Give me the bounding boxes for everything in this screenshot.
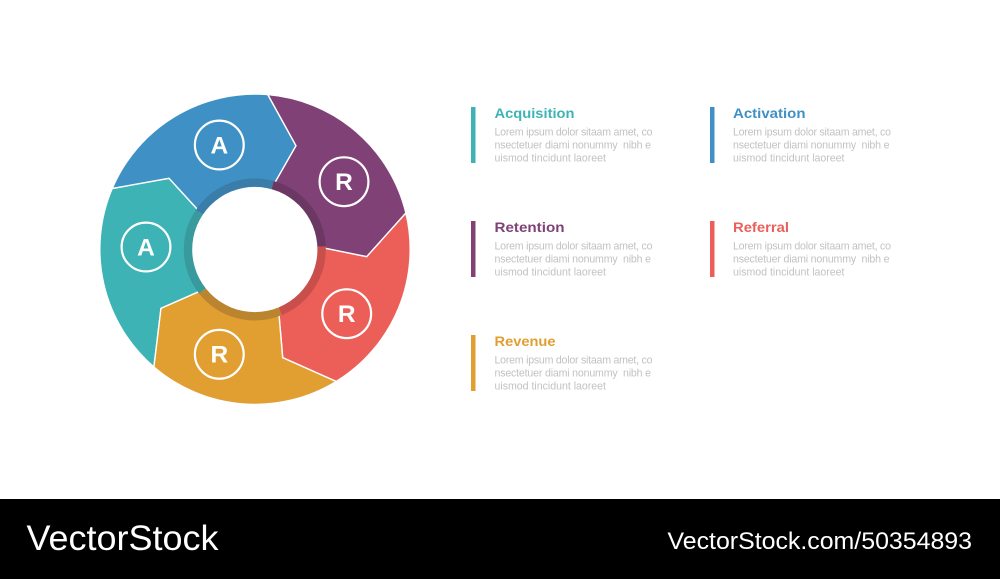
text block: Retention: [471, 219, 653, 278]
badge: A blue: [195, 121, 244, 169]
text block: Retention: Lorem ipsum dolor sitaam amet, co: [494, 240, 653, 252]
text block: Acquisition: [471, 105, 653, 164]
text block: Retention: Retention: [494, 219, 564, 235]
segment: activation (blue): [112, 94, 296, 214]
text block: Revenue: Lorem ipsum dolor sitaam amet, co: [494, 354, 653, 366]
inner shadow ring: [189, 184, 321, 315]
badge: A teal: [122, 223, 170, 271]
text block: Acquisition: Acquisition: [494, 105, 574, 121]
text block: Retention: nsectetuer diami nonummy nibh e: [494, 253, 651, 265]
footer logo: VectorStock: [26, 519, 219, 558]
center hole: [192, 187, 317, 312]
badge: A teal: A: [137, 234, 155, 262]
text block: Activation: Lorem ipsum dolor sitaam amet, co: [733, 126, 891, 138]
badge: R orange: [195, 330, 244, 379]
badge: R red: [322, 289, 371, 338]
segment: revenue (orange): [154, 289, 336, 404]
badge: R orange: R: [210, 342, 228, 368]
segment: acquisition (teal): [100, 178, 205, 367]
footer band: [0, 499, 1000, 579]
text block: Activation: nsectetuer diami nonummy nibh e: [733, 139, 890, 151]
text block: Acquisition: Lorem ipsum dolor sitaam amet, co: [494, 126, 653, 138]
text block: Acquisition: nsectetuer diami nonummy nibh e: [494, 139, 651, 151]
text block: Activation: uismod tincidunt laoreet: [733, 152, 845, 164]
text block: Activation: [710, 105, 891, 164]
badge: A blue: A: [210, 132, 228, 160]
text block: Activation: Activation: [733, 105, 806, 121]
segment: retention (purple): [268, 95, 406, 257]
text block: Referral: Lorem ipsum dolor sitaam amet, co: [733, 240, 891, 252]
donut cycle chart: [100, 94, 410, 404]
text block: Referral: [710, 219, 891, 278]
segment: referral (red): [278, 213, 410, 382]
text block: Acquisition: uismod tincidunt laoreet: [494, 152, 606, 164]
text block: Revenue: nsectetuer diami nonummy nibh e: [494, 367, 651, 379]
text block: Revenue: Revenue: [494, 333, 556, 349]
text block: Revenue: [471, 333, 653, 392]
text block: Referral: Referral: [733, 219, 789, 235]
text block: Referral: nsectetuer diami nonummy nibh e: [733, 253, 890, 265]
badge: R purple: [320, 157, 368, 206]
text block: Revenue: uismod tincidunt laoreet: [494, 380, 606, 392]
badge: R purple: R: [335, 169, 353, 196]
badge: R red: R: [338, 301, 356, 328]
text block: Referral: uismod tincidunt laoreet: [733, 266, 845, 278]
text block: Retention: uismod tincidunt laoreet: [494, 266, 606, 278]
footer url: VectorStock.com/50354893: [668, 528, 972, 555]
